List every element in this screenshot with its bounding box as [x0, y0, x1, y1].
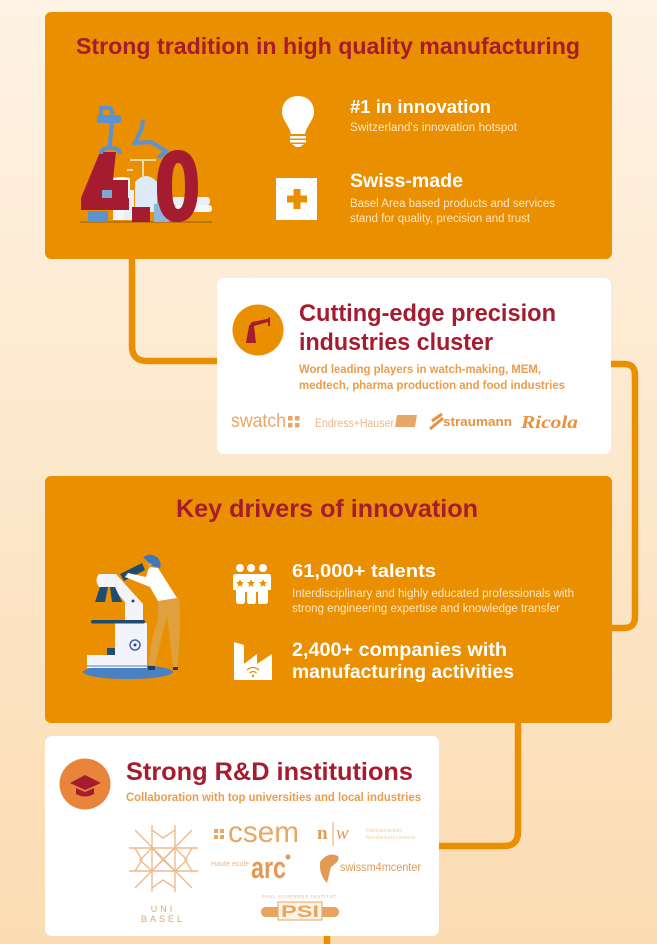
panel: key drivers of innovation [45, 476, 612, 723]
text block: talents: Interdisciplinary and highly educated professionals with [292, 588, 574, 600]
logos: industry players: swatch [231, 411, 286, 432]
text block: R&D description: Collaboration with top universities and local industries [126, 792, 421, 804]
text block: swiss-made: stand for quality, precision and trust [350, 213, 531, 225]
logo: swissm4mcenter: swissm4mcenter [340, 860, 421, 874]
text block: swiss-made: Basel Area based products and services [350, 198, 555, 210]
text block: cluster description [299, 364, 565, 392]
text block: cluster description: medtech, pharma production and food industries [299, 380, 565, 392]
logo: PSI: PAUL SCHERRER INSTITUT [262, 894, 337, 899]
text block: companies [292, 639, 514, 683]
text block: swiss-made: Swiss-made [350, 170, 463, 192]
logo: uni basel: UNI [151, 904, 175, 914]
logo: haute ecole arc [211, 850, 290, 885]
icon: robot arm badge [232, 304, 284, 356]
panel: precision industries cluster [217, 278, 611, 454]
logo: fhnw: Nordwestschweiz [366, 835, 416, 841]
logo: swissm4mcenter [320, 854, 421, 883]
panel: R&D institutions [45, 736, 439, 936]
text block: number one in innovation [350, 96, 518, 134]
heading: strong R&D institutions: Strong R&D institutions [126, 758, 413, 786]
logo: fhnw: Fachhochschule [366, 828, 402, 834]
heading: cutting-edge precision: Cutting-edge precision [299, 300, 556, 327]
logos: industry players: Ricola [520, 412, 578, 432]
logo: uni basel: BASEL [141, 914, 185, 924]
heading: key drivers: Key drivers of innovation [176, 495, 478, 523]
heading: cutting-edge precision: industries cluster [299, 329, 493, 356]
text block: swiss-made [350, 170, 555, 225]
icon: talents [233, 564, 271, 604]
text block: cluster description: Word leading players in watch-making, MEM, [299, 364, 541, 376]
panel: strong tradition [45, 12, 612, 259]
logo: uni basel [129, 825, 198, 924]
icon: industry 4.0 robots [80, 106, 212, 222]
logo: PSI [261, 894, 339, 921]
logo: fhnw: n [317, 823, 328, 844]
connector: first panel to precision cluster [132, 255, 220, 361]
heading: cutting-edge precision [299, 300, 556, 356]
logo: fhnw: w [336, 823, 349, 844]
heading: strong tradition: Strong tradition in high quality manufacturing [76, 33, 580, 59]
logo: fhnw [317, 822, 416, 846]
connector: key drivers to R&D institutions [436, 720, 518, 846]
icon: graduation cap badge [60, 758, 110, 810]
illustration: scientist at microscope [83, 555, 180, 679]
text block: talents [292, 560, 574, 615]
text block: companies: 2,400+ companies with [292, 639, 507, 661]
logo: csem: csem [228, 816, 299, 849]
text block: number one in innovation: Switzerland's innovation hotspot [350, 122, 518, 134]
text block: talents: 61,000+ talents [292, 560, 436, 581]
logo: haute ecole arc: Haute école [211, 861, 249, 868]
logo: haute ecole arc: arc [251, 850, 286, 885]
connector: precision cluster to key drivers [608, 364, 635, 628]
text block: talents: strong engineering expertise and knowledge transfer [292, 603, 560, 615]
logos: industry players: Endress+Hauser [315, 418, 394, 430]
logos: industry players: straumann [443, 414, 512, 429]
logos: industry players [231, 411, 578, 432]
text block: companies: manufacturing activities [292, 661, 514, 683]
icon: swiss cross [276, 178, 317, 220]
text block: number one in innovation: #1 in innovation [350, 96, 491, 117]
logo: PSI: PSI [281, 902, 319, 921]
icon: light bulb [282, 96, 314, 147]
connector: R&D institutions downward [324, 932, 330, 944]
icon: factory [234, 642, 272, 680]
